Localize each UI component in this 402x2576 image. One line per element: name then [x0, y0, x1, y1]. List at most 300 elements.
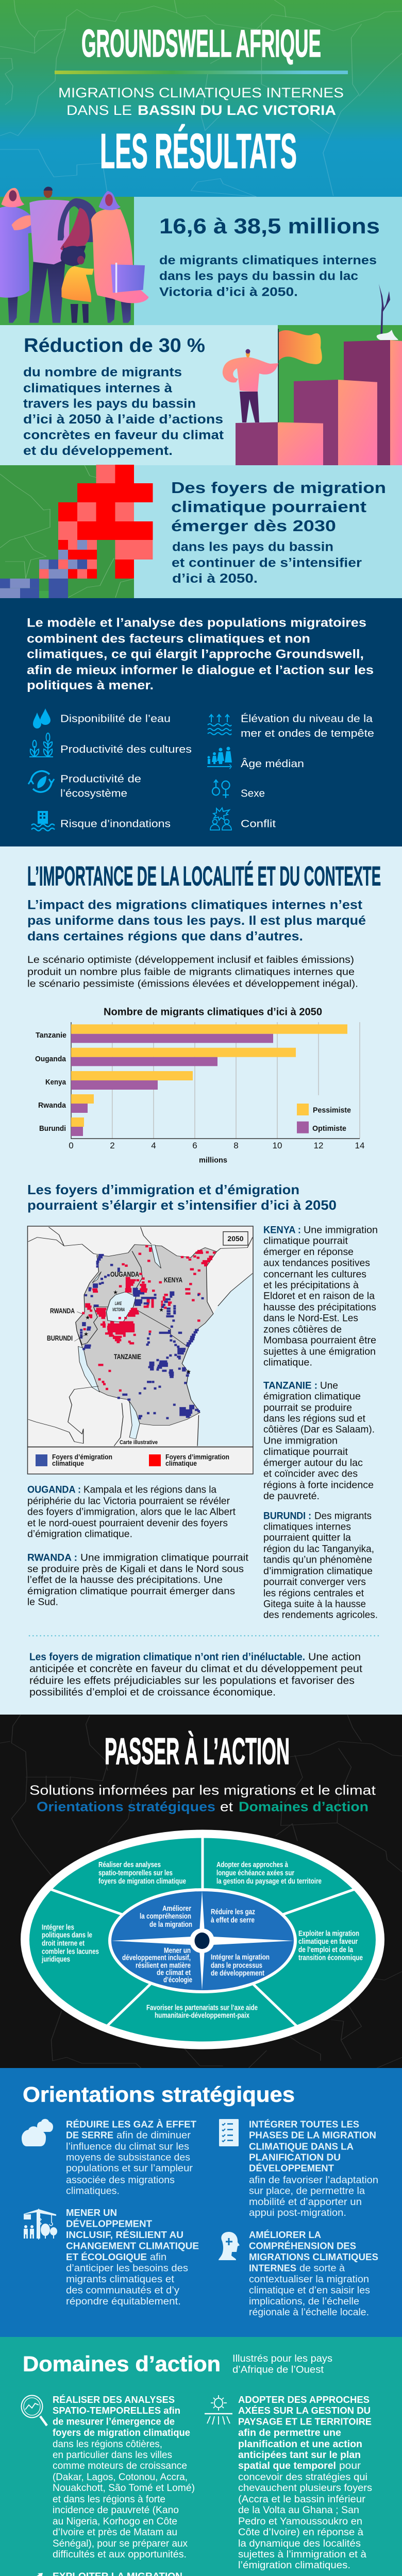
wheel: outer ring labels: foyers de migration climatique: [98, 1877, 186, 1886]
intro text: climatiques, ce qui élargit l’approche Groundswell,: [27, 648, 364, 662]
text: Tanzanie: émigration climatique: [263, 1392, 361, 1402]
text: Ouganda: OUGANDA :: [27, 1485, 81, 1496]
map legend: Foyers d’émigration: [52, 1453, 112, 1461]
text: Burundi: tandis qu’un phénomène: [263, 1555, 372, 1566]
scenario text: Le scénario optimiste (développement inclusif et faibles émissions): [27, 955, 354, 965]
wheel: outer ring labels: transition économique: [298, 1954, 363, 1962]
wheel: outer ring labels: la gestion du paysage et du territoire: [216, 1877, 322, 1886]
subheading: et: [220, 1799, 233, 1815]
stat description: Victoria d’ici à 2050.: [159, 285, 298, 299]
wheel: inner ring labels: de climat et: [157, 1969, 191, 1977]
factor labels: Productivité des cultures: [60, 744, 192, 755]
wheel: inner ring labels: résilient en matière: [136, 1961, 191, 1970]
item: réaliser des analyses: incidence de pauvreté (Kano: [53, 2505, 179, 2516]
wheel: outer ring labels: humanitaire-développement-paix: [155, 2011, 250, 2020]
wheel: inner ring labels: développement inclusif,: [122, 1954, 191, 1962]
description: d’ici à 2050.: [172, 571, 258, 586]
axis labels: [69, 1141, 364, 1150]
map labels: KENYA: [164, 1276, 182, 1284]
factor labels: [60, 713, 374, 830]
map legend: climatique: [165, 1460, 197, 1467]
text: Kenya: Une immigration: [304, 1225, 378, 1235]
wheel: inner ring labels: [122, 1904, 270, 1985]
text: Tanzanie: dans les régions sud et: [263, 1413, 366, 1424]
icon: checklist: [219, 2119, 239, 2146]
country labels: [35, 1031, 66, 1133]
text: Ouganda: et le nord-ouest pourraient devenir des foyers: [27, 1518, 228, 1529]
text: Burundi: d’immigration climatique: [263, 1566, 373, 1577]
text: Rwanda: l’effet de la hausse des précipitations. Une: [27, 1575, 223, 1586]
item: réaliser des analyses: comme moteurs de croissance: [53, 2461, 187, 2471]
wheel: inner ring labels: Mener un: [164, 1946, 191, 1955]
item: améliorer la compréhension: implications, de l’échelle: [249, 2296, 359, 2307]
intro text: politiques à mener.: [27, 679, 154, 692]
text: Tanzanie: climatique pourrait: [263, 1447, 348, 1458]
subheading: pas uniforme dans tous les pays. Il est plus marqué: [27, 913, 366, 928]
map heading: Les foyers d’immigration et d’émigration: [27, 1182, 299, 1197]
icon: head: [219, 2232, 240, 2260]
year box: [223, 1232, 248, 1245]
subheading: Illustrés pour les pays: [232, 2353, 332, 2364]
subtitle: BASSIN DU LAC VICTORIA: [138, 103, 336, 118]
text: Ouganda: Kampala et les régions dans la: [83, 1485, 216, 1496]
map legend: climatique: [52, 1460, 84, 1467]
icon: gender: [212, 780, 230, 798]
item: réduire les gaz: associée des migrations: [66, 2175, 175, 2185]
item: réaliser des analyses: de mesurer l’émergence de: [53, 2417, 175, 2428]
capital city stars: ★: [159, 1307, 164, 1313]
wheel: outer ring labels: combler les lacunes: [42, 1947, 99, 1956]
item: améliorer la compréhension: AMÉLIORER LA: [249, 2229, 321, 2240]
text: Ouganda: périphérie du lac Victoria pourraient se révéler: [27, 1496, 230, 1507]
item: adopter des approches: anticipées tant sur le plan: [238, 2450, 361, 2461]
chart title: Nombre de migrants climatiques d’ici à 2050: [104, 1007, 322, 1018]
item: mener un développement: DÉVELOPPEMENT: [66, 2218, 152, 2229]
wheel: inner ring labels: dans le processus: [211, 1961, 262, 1970]
country labels: Tanzanie: [36, 1031, 66, 1040]
intro text: afin de mieux informer le dialogue et l’action sur les: [27, 663, 374, 677]
map labels: LAKE: [115, 1301, 122, 1306]
text: Tanzanie: de pauvreté.: [263, 1491, 320, 1502]
heading: émerger dès 2030: [171, 517, 336, 535]
item: réduire les gaz: l’influence du climat sur les: [66, 2142, 189, 2153]
text: Tanzanie: Une immigration: [263, 1436, 338, 1447]
text: Kenya: climatique.: [263, 1358, 312, 1368]
text: Tanzanie: TANZANIE :: [263, 1381, 317, 1392]
subheading: [232, 2353, 332, 2376]
item: réaliser des analyses: SPATIO-TEMPORELLES afin: [53, 2405, 180, 2416]
map legend: [36, 1453, 229, 1467]
illustration: migrant family: [0, 187, 149, 323]
wheel: outer ring labels: juridiques: [41, 1955, 70, 1964]
heading: Domaines d’action: [23, 2352, 221, 2376]
item: améliorer la compréhension: climatique et d’en saisir les: [249, 2285, 370, 2296]
text: Burundi: Gitega suite à la hausse: [263, 1599, 366, 1610]
capital city stars: [83, 1289, 191, 1375]
description: climatiques internes à: [23, 381, 172, 396]
icon: magnifier: [22, 2396, 47, 2426]
wheel: inner ring labels: la compréhension: [140, 1912, 191, 1921]
hotspot mosaic: [0, 465, 153, 598]
text: Tanzanie: émerger autour du lac: [263, 1458, 363, 1468]
intro text: Le modèle et l’analyse des populations migratoires: [27, 616, 366, 630]
item: améliorer la compréhension: de sorte à: [299, 2263, 345, 2274]
item: mener un développement: ET ÉCOLOGIQUE: [66, 2251, 147, 2262]
axis labels: 10: [273, 1141, 282, 1150]
text: Tanzanie: Une: [320, 1381, 338, 1392]
item: réduire les gaz: populations et sur l’ampleur: [66, 2163, 193, 2174]
intro text: combinent des facteurs climatiques et non: [27, 632, 310, 646]
item: intégrer toutes les phases: DÉVELOPPEMENT: [249, 2163, 334, 2174]
icon: flood: [31, 811, 55, 831]
item: réaliser des analyses: Sénégal), pour se préparer aux: [53, 2538, 188, 2549]
item: améliorer la compréhension: [249, 2229, 378, 2318]
item: mener un développement: répondre équitablement.: [66, 2296, 181, 2307]
stat description: dans les pays du bassin du lac: [159, 269, 358, 283]
gradient bar: [55, 71, 348, 74]
text: Kenya: sujettes à une émigration: [263, 1346, 376, 1357]
wheel: outer ring labels: Favoriser les partenariats sur l’axe aide: [146, 2004, 258, 2012]
wheel: inner ring labels: à effet de serre: [211, 1916, 255, 1925]
item: améliorer la compréhension: MIGRATIONS CLIMATIQUES: [249, 2252, 378, 2262]
subheading: Orientations stratégiques: [37, 1799, 215, 1815]
scenario text: le scénario pessimiste (émissions élevées et développement inégal).: [27, 978, 358, 989]
factor labels: Élévation du niveau de la: [241, 713, 373, 725]
text: Burundi: climatiques internes: [263, 1522, 351, 1533]
item: intégrer toutes les phases: INTÉGRER TOUTES LES: [249, 2119, 359, 2129]
description: et continuer de s’intensifier: [172, 556, 362, 570]
text: Ouganda: [27, 1485, 236, 1540]
capital city stars: ★: [113, 1289, 118, 1296]
icon: clouds: [22, 2119, 53, 2146]
item: réduire les gaz: afin de diminuer: [116, 2130, 191, 2141]
text: Rwanda: Une immigration climatique pourrait: [80, 1553, 249, 1564]
text: Kenya: et les précipitations à: [263, 1280, 359, 1291]
wheel: outer ring labels: de l’emploi et de la: [298, 1945, 354, 1954]
text: Ouganda: des foyers d’immigration, alors que le lac Albert: [27, 1507, 236, 1518]
item: réaliser des analyses: d’Ivoire et près de Matam au: [53, 2527, 177, 2538]
heading: [171, 479, 386, 535]
stat description: [159, 253, 377, 299]
map labels: RWANDA: [50, 1307, 75, 1315]
subtitle: DANS LE: [66, 103, 132, 118]
map legend: Foyers d’immigration: [165, 1453, 229, 1461]
item: réaliser des analyses: en particulier dans les villes: [53, 2450, 172, 2461]
description: et du développement.: [23, 444, 173, 458]
panel: modèle et facteurs: [0, 598, 402, 846]
callout: not inevitable: [29, 1652, 362, 1698]
item: réaliser des analyses: (Dakar, Lagos, Cotonou, Accra,: [53, 2472, 188, 2483]
item: mener un développement: INCLUSIF, RÉSILIENT AU: [66, 2229, 183, 2240]
map labels: BURUNDI: [47, 1334, 73, 1342]
icon: water drops: [33, 708, 51, 728]
text: Burundi: les régions centrales et: [263, 1588, 364, 1599]
text: Burundi: Des migrants: [314, 1511, 372, 1522]
item: adopter des approches: chevauchent plusieurs foyers: [238, 2483, 372, 2494]
wheel: inner ring labels: Réduire les gaz: [211, 1908, 255, 1917]
text: Kenya: KENYA :: [263, 1225, 301, 1235]
icon: conflict: [210, 808, 231, 830]
text: Rwanda: émigration climatique pourrait émerger dans: [27, 1586, 235, 1597]
callout: not inevitable: réduire les effets préjudiciables sur les populations et favoriser des: [29, 1675, 355, 1687]
item: réduire les gaz: [66, 2119, 196, 2196]
subheading: [27, 897, 366, 943]
scenario text: [27, 955, 358, 989]
wheel diagram: [21, 1830, 384, 2049]
text: Rwanda: RWANDA :: [27, 1553, 77, 1564]
legend: [297, 1104, 351, 1133]
item: adopter des approches: la dynamique des localités: [238, 2538, 361, 2549]
item: adopter des approches: pour: [339, 2461, 361, 2471]
description: du nombre de migrants: [23, 365, 182, 380]
factor labels: mer et ondes de tempête: [241, 728, 374, 739]
description: dans les pays du bassin: [172, 539, 333, 554]
item: adopter des approches: planification et une action: [238, 2439, 362, 2450]
callout: not inevitable: Les foyers de migration climatique n’ont rien d’inéluctable.: [29, 1652, 305, 1663]
subheading: L’impact des migrations climatiques internes n’est: [27, 897, 363, 912]
text: Kenya: dans le Nord-Est. Les: [263, 1313, 358, 1324]
icon: growth chart: [21, 2573, 47, 2576]
axis labels: 2: [110, 1141, 115, 1150]
subheading: Domaines d’action: [239, 1799, 368, 1815]
wheel: inner ring labels: Intégrer la migration: [211, 1953, 270, 1962]
wheel: outer ring labels: Intégrer les: [42, 1923, 74, 1932]
subheading: Solutions informées par les migrations et le climat: [29, 1782, 376, 1798]
panel: passer à l'action: [0, 1715, 402, 2068]
map labels: TANZANIE: [114, 1352, 141, 1361]
illustration: steps, flag and man: [223, 284, 402, 465]
map labels: [47, 1270, 182, 1446]
panel: réduction de 30 %: [0, 284, 402, 465]
item: réaliser des analyses: [53, 2394, 195, 2560]
text: Kenya: émerger en réponse: [263, 1247, 354, 1258]
wheel: inner ring labels: de la migration: [149, 1920, 192, 1929]
heading: climatique pourraient: [171, 498, 366, 516]
subtitle: [58, 85, 344, 118]
wheel: outer ring labels: spatio-temporelles sur les: [98, 1869, 173, 1877]
item: mener un développement: MENER UN: [66, 2208, 117, 2218]
text: Burundi: pourraient quitter la: [263, 1533, 351, 1544]
wheel: outer ring labels: climatique en faveur: [298, 1937, 358, 1946]
item: réaliser des analyses: dans les régions côtières,: [53, 2439, 162, 2450]
subheading: d’Afrique de l’Ouest: [232, 2365, 324, 2376]
axis labels: 0: [69, 1141, 74, 1150]
icon: ecosystem: [28, 771, 54, 792]
item: mener un développement: CHANGEMENT CLIMATIQUE: [66, 2241, 199, 2251]
item: améliorer la compréhension: INTERNES: [249, 2263, 296, 2273]
wheel: inner ring labels: de développement: [211, 1969, 264, 1978]
item: adopter des approches: de la Volta au Ghana ; San: [238, 2505, 359, 2516]
factor labels: Risque d’inondations: [60, 819, 171, 830]
item: améliorer la compréhension: régionale à l’échelle locale.: [249, 2307, 369, 2318]
text: Ouganda: d’émigration climatique.: [27, 1529, 132, 1540]
capital city stars: ★: [85, 1314, 90, 1321]
text: Kenya: climatique pourrait: [263, 1236, 348, 1247]
text: Tanzanie: régions à forte incidence: [263, 1480, 374, 1490]
year box: 2050: [227, 1234, 244, 1243]
description: concrètes en faveur du climat: [23, 428, 224, 443]
map labels: Carte illustrative: [120, 1439, 158, 1446]
subheading: dans certaines régions que dans d’autres.: [27, 929, 303, 943]
item: réduire les gaz: RÉDUIRE LES GAZ À EFFET: [66, 2119, 196, 2129]
heading: Réduction de 30 %: [24, 335, 205, 357]
heading: Orientations stratégiques: [23, 2082, 295, 2106]
axis labels: 6: [192, 1141, 197, 1150]
wheel: inner ring labels: d’écologie: [163, 1976, 192, 1985]
description: d’ici à 2050 à l’aide d’actions: [23, 412, 223, 427]
text: Burundi: pourrait converger vers: [263, 1577, 366, 1588]
factor labels: l’écosystème: [60, 788, 127, 800]
wheel: outer ring labels: longue échéance axées sur: [216, 1869, 294, 1877]
item: adopter des approches: concevoir des stratégies qui: [238, 2472, 367, 2483]
icon: sea level: [208, 715, 231, 735]
text: Tanzanie: [263, 1381, 375, 1502]
map background borders: [0, 465, 134, 598]
item: adopter des approches: sujettes à l’immigration et à: [238, 2549, 366, 2560]
country labels: Ouganda: [35, 1055, 66, 1063]
panel: foyers de migration: [0, 465, 402, 598]
text: Kenya: aux tendances positives: [263, 1258, 370, 1268]
axis labels: 4: [151, 1141, 156, 1150]
item: réaliser des analyses: difficultés et aux opportunités.: [53, 2549, 187, 2560]
description: [23, 365, 224, 458]
axis labels: 14: [355, 1141, 364, 1150]
item: intégrer toutes les phases: CLIMATIQUE DANS LA: [249, 2142, 354, 2152]
text: Kenya: concernant les cultures: [263, 1269, 366, 1280]
text: Kenya: [263, 1225, 378, 1368]
panel: header: [0, 0, 402, 197]
item: réduire les gaz: DE SERRE: [66, 2130, 113, 2141]
axis labels: 12: [314, 1141, 323, 1150]
text: Kenya: Mombasa pourraient être: [263, 1335, 376, 1346]
factor labels: Âge médian: [241, 758, 304, 770]
capital city stars: ★: [83, 1331, 89, 1337]
panel: domaines d'action: [0, 2337, 402, 2576]
callout: not inevitable: possibilités d’emploi et de croissance économique.: [29, 1687, 276, 1698]
map labels: OUGANDA: [110, 1270, 139, 1278]
factor labels: Productivité de: [60, 774, 141, 785]
callout: not inevitable: anticipée et concrète en faveur du climat et du développement peut: [29, 1664, 362, 1675]
icon: crane and community: [24, 2209, 57, 2240]
panel: importance de la localité: [0, 846, 402, 1715]
wheel: outer ring labels: Réaliser des analyses: [98, 1860, 161, 1869]
map labels: VICTORIA: [112, 1307, 125, 1312]
map heading: [27, 1182, 337, 1213]
item: réaliser des analyses: Nouakchott, São Tomé et Lomé): [53, 2483, 195, 2494]
axis labels: 8: [233, 1141, 239, 1150]
hotspot map: [28, 1226, 253, 1474]
item: réduire les gaz: moyens de subsistance des: [66, 2153, 190, 2163]
item: mener un développement: des communautés et d’y: [66, 2285, 180, 2296]
description: [172, 539, 362, 586]
stat description: de migrants climatiques internes: [159, 253, 377, 267]
item: intégrer toutes les phases: sur place, de permettre la: [249, 2185, 365, 2196]
item: adopter des approches: l’émigration climatiques.: [238, 2560, 350, 2571]
text: Burundi: [263, 1511, 378, 1621]
text: Tanzanie: côtières (Dar es Salaam).: [263, 1425, 375, 1435]
scenario text: produit un nombre plus faible de migrants climatiques internes que: [27, 967, 355, 978]
item: adopter des approches: ADOPTER DES APPROCHES: [238, 2395, 370, 2405]
wheel: outer ring labels: droit interne et: [42, 1939, 85, 1948]
item: mener un développement: afin: [150, 2252, 166, 2263]
item: intégrer toutes les phases: afin de favoriser l’adaptation: [249, 2175, 378, 2185]
text: Kenya: Eldoret et en raison de la: [263, 1291, 375, 1302]
item: réaliser des analyses: RÉALISER DES ANALYSES: [53, 2394, 175, 2405]
wheel: inner ring labels: Améliorer: [162, 1904, 191, 1913]
item: améliorer la compréhension: COMPRÉHENSION DES: [249, 2241, 356, 2251]
text: Burundi: région du lac Tanganyika,: [263, 1544, 374, 1555]
item: adopter des approches: [238, 2395, 372, 2571]
item: adopter des approches: Côte d’Ivoire) en réponse à: [238, 2527, 363, 2538]
map heading: pourraient s’élargir et s’intensifier d’ici à 2050: [27, 1197, 337, 1213]
description: travers les pays du bassin: [23, 397, 196, 411]
item: intégrer toutes les phases: [249, 2119, 378, 2218]
wheel: outer ring labels: Adopter des approches à: [216, 1860, 289, 1869]
item: mener un développement: d’anticiper les besoins des: [66, 2263, 188, 2274]
text: Rwanda: [27, 1553, 249, 1608]
country labels: Kenya: [45, 1078, 66, 1087]
factor labels: Sexe: [241, 788, 265, 800]
subheading: [29, 1782, 376, 1815]
item: réaliser des analyses: au Nigeria, Korhogo en Côte: [53, 2516, 177, 2527]
text: Burundi: BURUNDI :: [263, 1511, 311, 1522]
icon: median age: [207, 747, 232, 769]
country labels: Burundi: [39, 1124, 66, 1133]
factor labels: Conflit: [241, 819, 276, 830]
item: améliorer la compréhension: contextualiser la migration: [249, 2274, 369, 2285]
item: adopter des approches: AXÉES SUR LA GESTION DU: [238, 2405, 371, 2416]
factor labels: Disponibilité de l’eau: [60, 714, 171, 725]
item: intégrer toutes les phases: PHASES DE LA MIGRATION: [249, 2130, 376, 2141]
text: Kenya: zones côtières de: [263, 1324, 342, 1335]
item: mener un développement: [66, 2208, 199, 2307]
item: intégrer toutes les phases: PLANIFICATION DU: [249, 2153, 341, 2163]
callout: not inevitable: Une action: [308, 1652, 361, 1663]
capital city stars: ★: [186, 1368, 191, 1375]
item: mener un développement: migrants climatiques et: [66, 2274, 175, 2285]
item: adopter des approches: afin de permettre une: [238, 2428, 341, 2438]
item: adopter des approches: Pedro et Yamoussoukro en: [238, 2516, 362, 2527]
item: intégrer toutes les phases: appui post-migration.: [249, 2208, 346, 2218]
axis unit: millions: [199, 1156, 227, 1165]
item: réaliser des analyses: et dans les régions à forte: [53, 2494, 165, 2505]
panel: 16,6 à 38,5 millions: [0, 197, 402, 325]
item: réaliser des analyses: foyers de migration climatique: [53, 2428, 190, 2438]
text: Kenya: hausse des précipitations: [263, 1302, 376, 1313]
text: Rwanda: se produire près de Kigali et dans le Nord sous: [27, 1564, 244, 1575]
legend: Optimiste: [312, 1124, 346, 1133]
text: Burundi: des rendements agricoles.: [263, 1610, 378, 1621]
subtitle: MIGRATIONS CLIMATIQUES INTERNES: [58, 85, 344, 100]
intro text: [27, 616, 374, 692]
text: Tanzanie: pourrait se produire: [263, 1403, 352, 1414]
item: adopter des approches: spatial que temporel: [238, 2461, 336, 2471]
item: réduire les gaz: climatiques.: [66, 2185, 120, 2196]
stat number: 16,6 à 38,5 millions: [159, 214, 380, 238]
text: Tanzanie: et coïncider avec des: [263, 1469, 358, 1480]
item: adopter des approches: (Accra et le bassin inférieur: [238, 2494, 366, 2505]
icon: crops: [29, 733, 53, 757]
wheel: outer ring labels: [41, 1860, 363, 2020]
icon: sun and land: [205, 2395, 232, 2425]
panel: orientations stratégiques: [0, 2068, 402, 2337]
wheel: outer ring labels: Exploiter la migration: [298, 1929, 359, 1938]
text: Rwanda: le Sud.: [27, 1597, 58, 1608]
item: intégrer toutes les phases: mobilité et d’apporter un: [249, 2197, 362, 2208]
legend: Pessimiste: [313, 1106, 351, 1114]
country labels: Rwanda: [38, 1101, 66, 1110]
heading: Des foyers de migration: [171, 479, 386, 497]
